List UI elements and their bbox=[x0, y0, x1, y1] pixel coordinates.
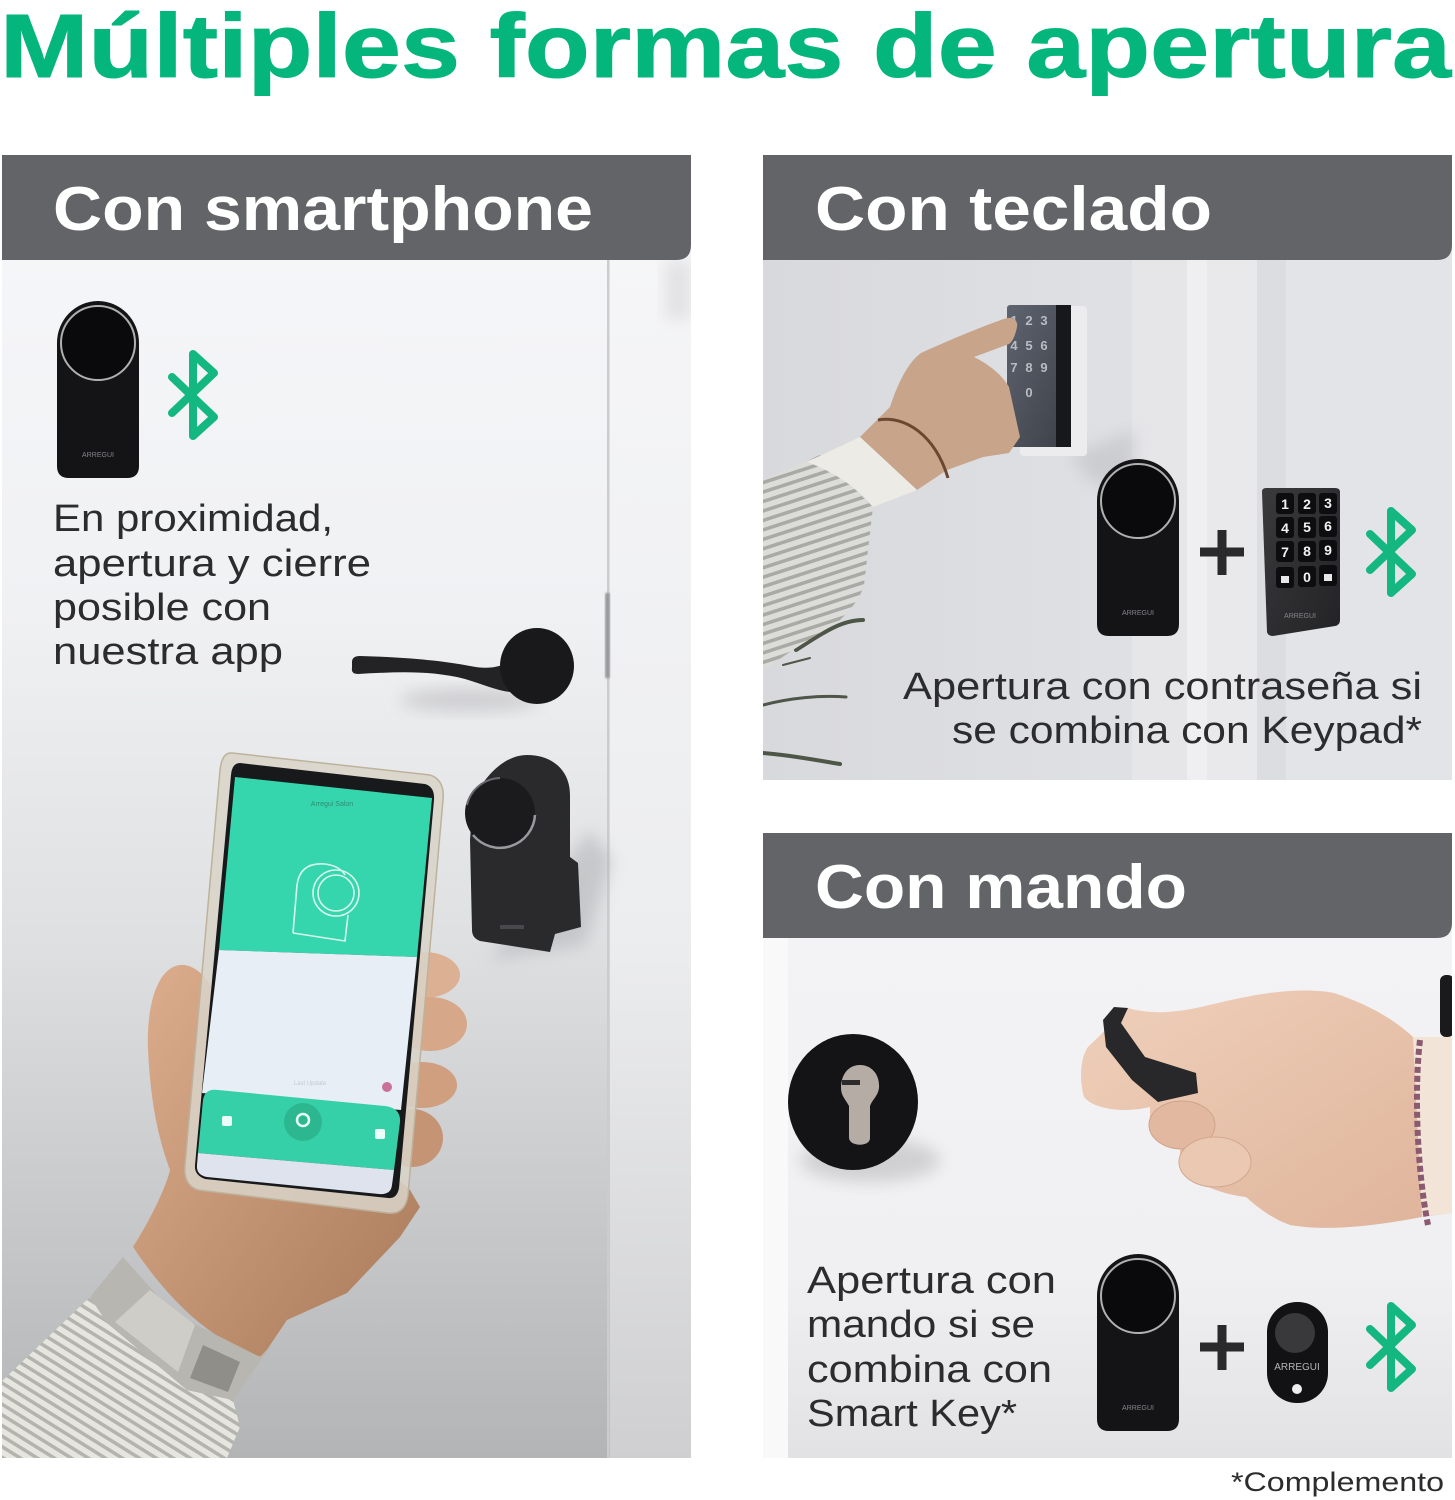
door handle bbox=[352, 628, 574, 712]
icon: keypad product: 1 bbox=[1281, 496, 1289, 512]
plant leaves bbox=[763, 620, 863, 764]
text: teclado description: se combina con Keypad* bbox=[952, 710, 1422, 752]
icon: keypad product: ARREGUI bbox=[1284, 613, 1316, 620]
app screen: white middle bbox=[202, 950, 417, 1110]
header: con mando bbox=[763, 833, 1452, 938]
icon: keypad product: 0 bbox=[1303, 569, 1311, 585]
text: smartphone description: En proximidad, bbox=[53, 498, 333, 540]
footnote: *Complemento bbox=[1231, 1467, 1444, 1497]
panel: con mando bbox=[788, 927, 1452, 1458]
panel: con teclado bbox=[763, 248, 1452, 780]
text: mando description bbox=[807, 1260, 1056, 1435]
wall keypad: 6 bbox=[1040, 338, 1048, 353]
app screen: green top bbox=[219, 777, 432, 957]
icon: bluetooth (smartphone) bbox=[172, 354, 214, 436]
bracelet bbox=[1417, 1040, 1428, 1225]
key fob bbox=[1103, 1007, 1198, 1102]
wall keypad: 0 bbox=[1025, 385, 1033, 400]
header: con teclado bbox=[763, 155, 1452, 260]
text: smartphone description: nuestra app bbox=[53, 631, 283, 673]
header: con mando: Con mando bbox=[815, 853, 1187, 922]
icon: smart key fob bbox=[1267, 1302, 1328, 1403]
wall keypad: 5 bbox=[1025, 338, 1033, 353]
lock outline on app bbox=[293, 864, 359, 941]
icon: lock product (mando): ARREGUI bbox=[1122, 1405, 1154, 1412]
icon: bluetooth (teclado) bbox=[1370, 511, 1412, 593]
icon: lock product (teclado) bbox=[1097, 459, 1179, 636]
icon: lock product (teclado): ARREGUI bbox=[1122, 610, 1154, 617]
wall keypad: 3 bbox=[1040, 313, 1048, 328]
unlock button bbox=[284, 1103, 322, 1141]
icon: smart key fob: ARREGUI bbox=[1274, 1362, 1320, 1373]
text: mando description: mando si se bbox=[807, 1304, 1035, 1346]
wall keypad bbox=[1007, 305, 1087, 456]
wrist watch bbox=[90, 1257, 273, 1400]
sleeve bbox=[2, 1297, 240, 1458]
panel: con smartphone bbox=[2, 155, 691, 1458]
wall keypad: 4 bbox=[1010, 338, 1018, 353]
text: smartphone description: posible con bbox=[53, 587, 271, 629]
header: con smartphone bbox=[2, 155, 691, 260]
door rosette with cylinder bbox=[788, 1034, 918, 1170]
text: teclado description bbox=[903, 666, 1422, 752]
bracelet bbox=[878, 419, 948, 478]
icon: keypad product bbox=[1262, 488, 1340, 636]
icon: keypad product: 8 bbox=[1303, 543, 1311, 559]
text: teclado description: Apertura con contraseña si bbox=[903, 666, 1422, 708]
app screen: control bar bbox=[198, 1090, 400, 1170]
wall keypad: 9 bbox=[1040, 360, 1048, 375]
wall keypad: 1 bbox=[1010, 313, 1018, 328]
wall keypad: 7 bbox=[1010, 360, 1018, 375]
text: mando description: Apertura con bbox=[807, 1260, 1056, 1302]
icon: bluetooth (mando) bbox=[1370, 1306, 1412, 1388]
smart lock on door bbox=[465, 755, 612, 960]
photo background: door bbox=[788, 927, 1452, 1458]
icon: keypad product: 5 bbox=[1303, 519, 1311, 535]
icon: keypad product: 4 bbox=[1281, 520, 1289, 536]
text: mando description: Smart Key* bbox=[807, 1393, 1017, 1435]
icon: plus (mando) bbox=[1200, 1325, 1244, 1370]
icon: keypad product: 2 bbox=[1303, 496, 1311, 512]
photo background: door bbox=[2, 155, 691, 1458]
icon: lock product (smartphone) bbox=[57, 301, 139, 478]
smartphone: Arregui Salon bbox=[311, 801, 353, 808]
wall keypad: 2 bbox=[1025, 313, 1033, 328]
header: con teclado: Con teclado bbox=[815, 175, 1212, 244]
text: smartphone description bbox=[53, 498, 371, 673]
icon: keypad product: 3 bbox=[1324, 495, 1332, 511]
text: mando description: combina con bbox=[807, 1349, 1052, 1391]
icon: plus (teclado) bbox=[1200, 530, 1244, 575]
photo background: wall and door frame bbox=[763, 248, 1452, 780]
shirt sleeve bbox=[763, 437, 917, 670]
text: smartphone description: apertura y cierre bbox=[53, 543, 371, 585]
door handle edge bbox=[1440, 975, 1452, 1037]
icon: keypad product: 6 bbox=[1324, 518, 1332, 534]
icon: keypad product: 7 bbox=[1281, 544, 1289, 560]
header: con smartphone: Con smartphone bbox=[53, 175, 593, 244]
hand: palm and wrist bbox=[133, 952, 467, 1357]
icon: lock product (mando) bbox=[1097, 1254, 1179, 1431]
hand holding key fob bbox=[1081, 990, 1452, 1228]
icon: lock product (smartphone): ARREGUI bbox=[82, 452, 114, 459]
hand pressing keypad bbox=[860, 318, 1020, 490]
smartphone: Last Update bbox=[294, 1081, 327, 1087]
wall keypad: 8 bbox=[1025, 360, 1033, 375]
icon: keypad product: 9 bbox=[1324, 542, 1332, 558]
smartphone bbox=[185, 753, 443, 1213]
